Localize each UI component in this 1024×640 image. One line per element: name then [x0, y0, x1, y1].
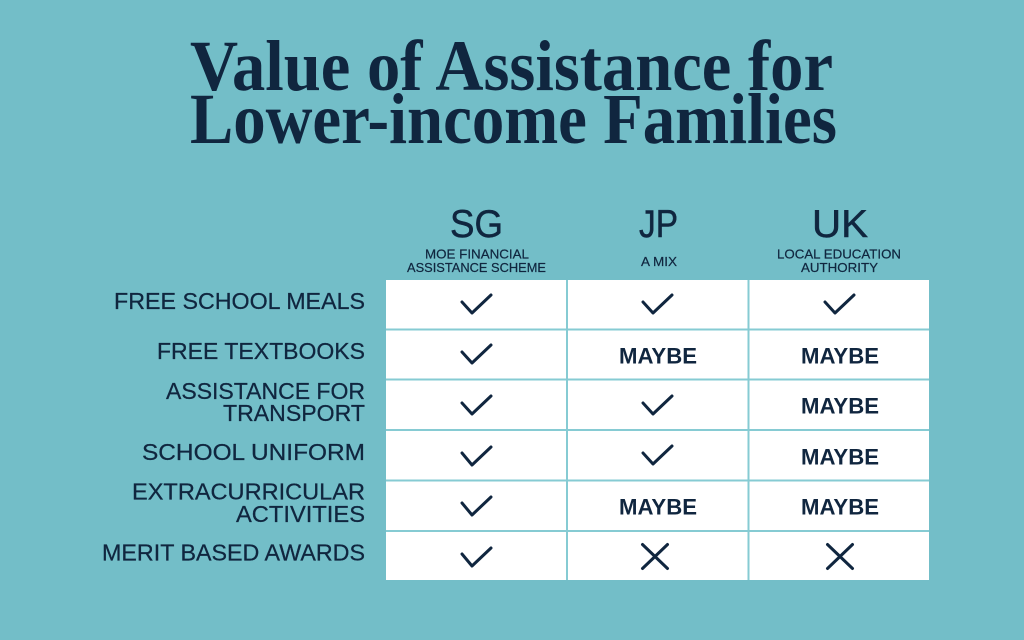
row: merit based awards: [462, 544, 852, 568]
row: assistance for transport: [462, 394, 879, 418]
row labels: FREE SCHOOL MEALS: [114, 288, 365, 314]
row labels: EXTRACURRICULAR: [132, 478, 365, 504]
column header: UK: [777, 203, 901, 275]
comparison table: [386, 280, 929, 580]
title: [190, 26, 837, 159]
row: school uniform: [462, 444, 879, 470]
row: free school meals: [462, 295, 854, 313]
row labels: [102, 288, 365, 566]
row labels: MERIT BASED AWARDS: [102, 540, 365, 566]
column header: SG: SG: [450, 203, 503, 246]
title: Lower-income Families: [190, 79, 837, 159]
column header: JP: A MIX: [641, 255, 678, 269]
row labels: TRANSPORT: [223, 400, 365, 426]
row: assistance for transport: MAYBE: [801, 394, 879, 418]
row: extracurricular activities: [462, 494, 879, 520]
row labels: ASSISTANCE FOR: [166, 378, 365, 404]
row labels: SCHOOL UNIFORM: [142, 439, 365, 465]
column header: JP: JP: [639, 203, 678, 246]
column header: UK: AUTHORITY: [801, 261, 879, 275]
row: free textbooks: MAYBE: [801, 344, 879, 368]
column header: SG: ASSISTANCE SCHEME: [407, 261, 546, 275]
row: free textbooks: [462, 344, 879, 368]
row: school uniform: MAYBE: [801, 444, 879, 470]
row labels: ACTIVITIES: [236, 501, 365, 527]
column header: UK: UK: [812, 203, 868, 246]
row labels: FREE TEXTBOOKS: [157, 338, 365, 364]
column header: SG: [407, 203, 546, 275]
row: extracurricular activities: MAYBE: [801, 494, 879, 520]
column header: SG: MOE FINANCIAL: [425, 248, 529, 262]
title: Value of Assistance for: [190, 26, 833, 106]
row: extracurricular activities: MAYBE: [619, 494, 697, 520]
column header: JP: [639, 203, 678, 269]
column header: UK: LOCAL EDUCATION: [777, 248, 901, 262]
row: free textbooks: MAYBE: [619, 344, 697, 368]
